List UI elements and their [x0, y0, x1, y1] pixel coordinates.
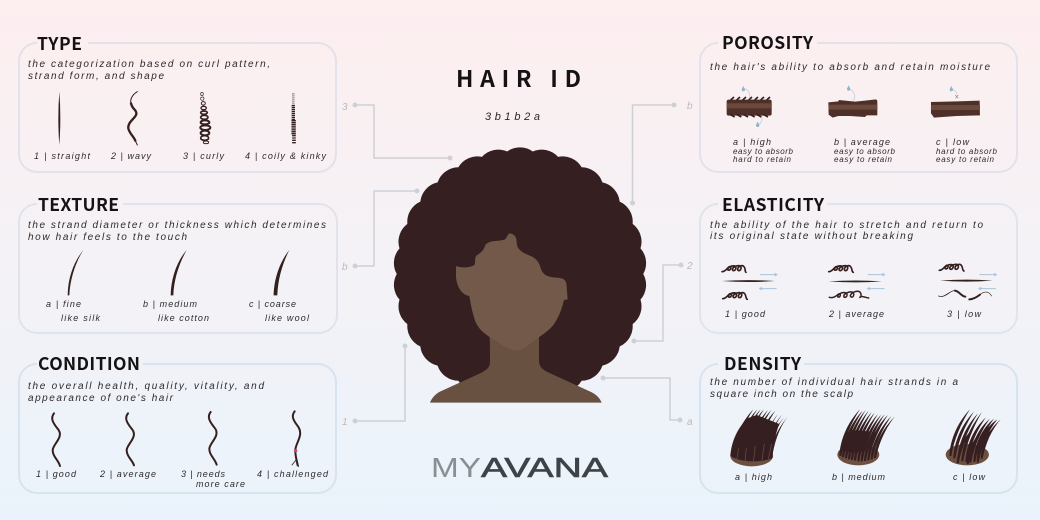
porosity labels — [733, 137, 998, 164]
type labels — [34, 151, 326, 161]
connector: condition — [342, 344, 408, 428]
connector: elasticity: 2 — [686, 261, 693, 272]
porosity border — [700, 43, 1017, 172]
type description: strand form, and shape — [28, 71, 164, 82]
texture labels: like wool — [265, 313, 310, 323]
connector: condition: 1 — [342, 417, 348, 428]
panel: elasticity — [700, 192, 1017, 333]
connector: type: 3 — [342, 102, 348, 113]
face — [456, 233, 568, 351]
density labels: a | high — [735, 472, 772, 482]
elasticity description: the ability of the hair to stretch and return to — [710, 220, 983, 231]
type description: the categorization based on curl pattern, — [28, 59, 270, 70]
central portrait — [394, 147, 646, 403]
icon: average porosity shaft — [828, 85, 877, 118]
connector: density — [600, 376, 693, 428]
condition heading: CONDITION — [38, 351, 140, 376]
porosity description: the hair's ability to absorb and retain moisture — [710, 62, 990, 73]
porosity labels: easy to absorb — [733, 147, 794, 156]
icon: low porosity shaft — [931, 86, 980, 118]
logo: MYAVANA: MY — [431, 452, 481, 483]
porosity labels: b | average — [834, 137, 890, 147]
density description — [710, 377, 958, 400]
hair id code: 3b1b2a — [485, 111, 540, 123]
condition labels: 4 | challenged — [257, 469, 329, 479]
title: HAIR ID — [456, 60, 581, 94]
density description: the number of individual hair strands in a — [710, 377, 958, 388]
afro hair — [394, 147, 646, 401]
density labels: c | low — [953, 472, 986, 482]
icon: curly strand — [200, 92, 210, 144]
condition labels — [36, 469, 329, 489]
elasticity border — [700, 204, 1017, 333]
type labels: 1 | straight — [34, 151, 90, 161]
elasticity description: its original state without breaking — [710, 231, 913, 242]
texture labels: b | medium — [143, 299, 198, 309]
texture labels: c | coarse — [249, 299, 296, 309]
elasticity labels: 2 | average — [828, 309, 884, 319]
type labels: 3 | curly — [183, 151, 224, 161]
type labels: 2 | wavy — [110, 151, 152, 161]
density border — [700, 364, 1017, 493]
connector: porosity: b — [687, 101, 693, 112]
connector: density: a — [687, 417, 693, 428]
density labels: b | medium — [832, 472, 886, 482]
icon: coily strand — [289, 93, 298, 143]
condition labels: 1 | good — [36, 469, 77, 479]
icon: medium density — [837, 409, 895, 465]
texture labels: a | fine — [46, 299, 81, 309]
texture description: how hair feels to the touch — [28, 232, 187, 243]
panel: density — [700, 351, 1017, 493]
elasticity description — [710, 220, 983, 242]
icons: condition strands — [52, 411, 300, 467]
panel: texture — [19, 192, 337, 333]
condition description: the overall health, quality, vitality, and — [28, 381, 264, 392]
porosity labels: easy to retain — [834, 155, 893, 164]
elasticity labels — [725, 309, 982, 319]
elasticity heading: ELASTICITY — [722, 192, 825, 217]
connector: texture: b — [342, 262, 348, 273]
elasticity labels: 1 | good — [725, 309, 766, 319]
porosity labels: easy to absorb — [834, 147, 896, 156]
elasticity labels: 3 | low — [947, 309, 982, 319]
condition description: appearance of one's hair — [28, 393, 174, 404]
icons: strand thickness — [68, 250, 289, 295]
panel: porosity — [700, 30, 1017, 172]
icon: straight strand — [58, 92, 60, 145]
type border — [19, 43, 336, 172]
icon: low elasticity — [939, 264, 996, 299]
logo: MYAVANA — [431, 452, 608, 483]
texture description — [28, 220, 326, 243]
neck and shoulders — [430, 330, 602, 403]
icon: high porosity shaft — [727, 86, 772, 127]
icon: high density — [730, 409, 787, 466]
type heading: TYPE — [37, 31, 82, 56]
condition border — [19, 364, 336, 493]
porosity labels: hard to absorb — [936, 147, 998, 156]
connector: texture — [342, 188, 420, 273]
porosity labels: c | low — [936, 137, 970, 147]
texture border — [19, 204, 337, 333]
texture heading: TEXTURE — [38, 192, 119, 217]
condition labels: 3 | needs — [181, 469, 226, 479]
porosity labels: hard to retain — [733, 155, 792, 164]
density labels — [735, 472, 986, 482]
type labels: 4 | coily & kinky — [245, 151, 326, 161]
type description — [28, 59, 270, 82]
logo: MYAVANA: AVANA — [481, 452, 608, 483]
connector: type — [342, 102, 452, 160]
connector: elasticity — [632, 261, 693, 344]
panel: condition — [19, 351, 336, 493]
texture labels: like silk — [61, 313, 100, 323]
texture labels: like cotton — [158, 313, 209, 323]
density description: square inch on the scalp — [710, 389, 853, 400]
icon: low density — [946, 409, 1001, 465]
connector: porosity — [630, 101, 693, 206]
condition labels: more care — [196, 479, 245, 489]
porosity labels: easy to retain — [936, 155, 995, 164]
panel: type — [19, 31, 336, 172]
texture labels — [46, 299, 310, 323]
icon: average elasticity — [829, 266, 885, 298]
porosity labels: a | high — [733, 137, 771, 147]
density heading: DENSITY — [724, 351, 802, 376]
icon: wavy strand — [128, 92, 137, 145]
condition description — [28, 381, 264, 404]
porosity heading: POROSITY — [722, 30, 814, 55]
texture description: the strand diameter or thickness which determines — [28, 220, 326, 231]
condition labels: 2 | average — [99, 469, 156, 479]
icon: good elasticity — [722, 266, 777, 299]
